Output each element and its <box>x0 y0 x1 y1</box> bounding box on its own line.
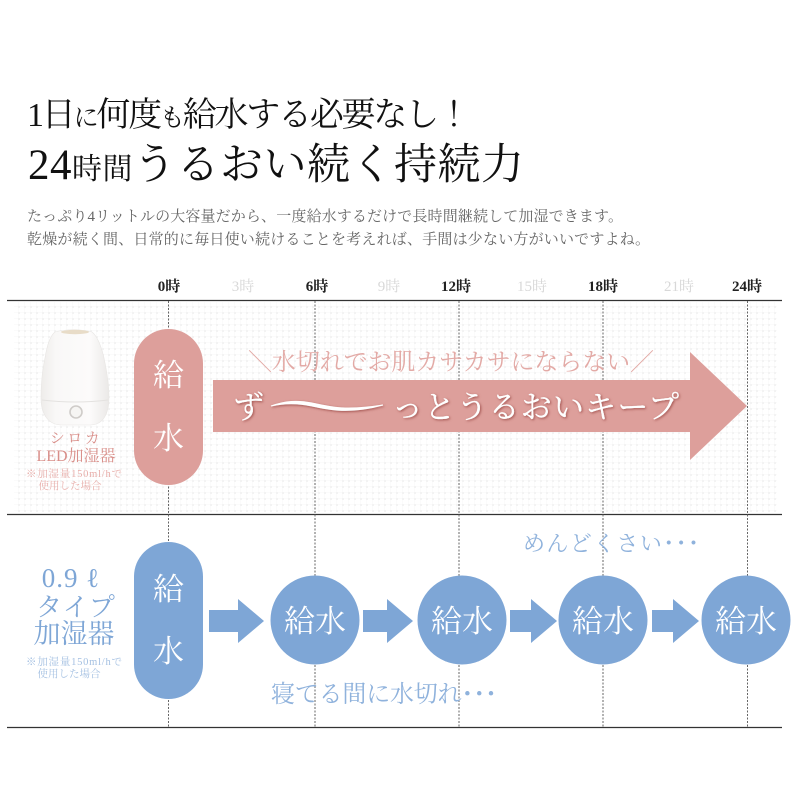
label: shiroca LED humidifier: LED加湿器 <box>36 447 116 465</box>
label: shiroca LED humidifier: シロカ <box>50 431 102 447</box>
circle: water fill 24h: 給水 <box>715 604 777 639</box>
circle: water fill 24h <box>702 576 790 664</box>
circle: water fill 12h: 給水 <box>431 604 493 639</box>
description paragraph: 乾燥が続く間、日常的に毎日使い続けることを考えれば、手間は少ない方がいいですよね。 <box>27 230 650 248</box>
circle: water fill 18h <box>558 576 648 664</box>
label: 0.9L type humidifier: 加湿器 <box>34 619 114 649</box>
label: shiroca LED humidifier: 使用した場合 <box>38 479 102 492</box>
label: 0.9L type humidifier <box>26 563 122 680</box>
label: 0.9L type humidifier: タイプ <box>36 593 116 622</box>
title <box>27 96 524 189</box>
caption: bothersome: めんどくさい･･･ <box>523 531 699 556</box>
circle: water fill 6h <box>270 576 360 664</box>
circle: water fill 18h: 給水 <box>572 604 634 639</box>
caption over arrow: ＼水切れでお肌カサカサにならない／ <box>248 349 654 376</box>
pill: pink water fill: 水 <box>153 421 184 456</box>
time axis labels: 3時 <box>232 278 254 295</box>
arrow: pink keep moisture <box>213 352 747 460</box>
description paragraph <box>27 207 650 248</box>
time axis labels: 18時 <box>588 277 618 295</box>
title line 2: 24時間うるおい続く持続力 <box>28 142 524 189</box>
pill: pink water fill <box>134 329 203 485</box>
time axis labels: 0時 <box>158 277 180 295</box>
arrow text: っとうるおいキープ <box>392 390 679 425</box>
pill: pink water fill: 給 <box>153 358 184 393</box>
time axis labels: 12時 <box>441 277 471 295</box>
icon: humidifier <box>41 330 109 425</box>
time axis labels: 24時 <box>732 277 762 295</box>
time axis labels: 15時 <box>517 278 547 295</box>
label: shiroca LED humidifier: ※加湿量150ml/hで <box>26 467 122 480</box>
description paragraph: たっぷり4リットルの大容量だから、一度給水するだけで長時間継続して加湿できます。 <box>27 207 623 225</box>
caption: runs out while sleeping: 寝てる間に水切れ･･･ <box>271 681 497 708</box>
time axis labels: 6時 <box>306 277 328 295</box>
arrow: blue 2 <box>363 599 413 643</box>
time axis labels: 9時 <box>378 278 400 295</box>
label: 0.9L type humidifier: 使用した場合 <box>38 667 101 680</box>
circle: water fill 12h <box>418 576 506 664</box>
time grid dashed lines <box>168 301 748 727</box>
time axis labels <box>158 277 762 295</box>
panel: shiroca dotted background <box>14 302 777 512</box>
title line 1: 1日に何度も給水する必要なし！ <box>27 96 471 134</box>
circle: water fill 6h: 給水 <box>284 604 346 639</box>
pill: blue water fill: 水 <box>153 634 184 669</box>
arrow: blue 1 <box>209 599 264 643</box>
label: 0.9L type humidifier: ※加湿量150ml/hで <box>26 655 122 668</box>
label: shiroca LED humidifier <box>26 431 122 492</box>
arrow: blue 3 <box>510 599 557 643</box>
horizontal rules <box>7 300 782 728</box>
time axis labels: 21時 <box>664 278 694 295</box>
pill: blue water fill <box>134 542 203 699</box>
arrow: blue 4 <box>652 599 699 643</box>
arrow text: ず <box>233 390 264 425</box>
pill: blue water fill: 給 <box>153 572 184 607</box>
label: 0.9L type humidifier: 0.9 ℓ <box>42 563 100 593</box>
arrow text <box>233 390 679 425</box>
